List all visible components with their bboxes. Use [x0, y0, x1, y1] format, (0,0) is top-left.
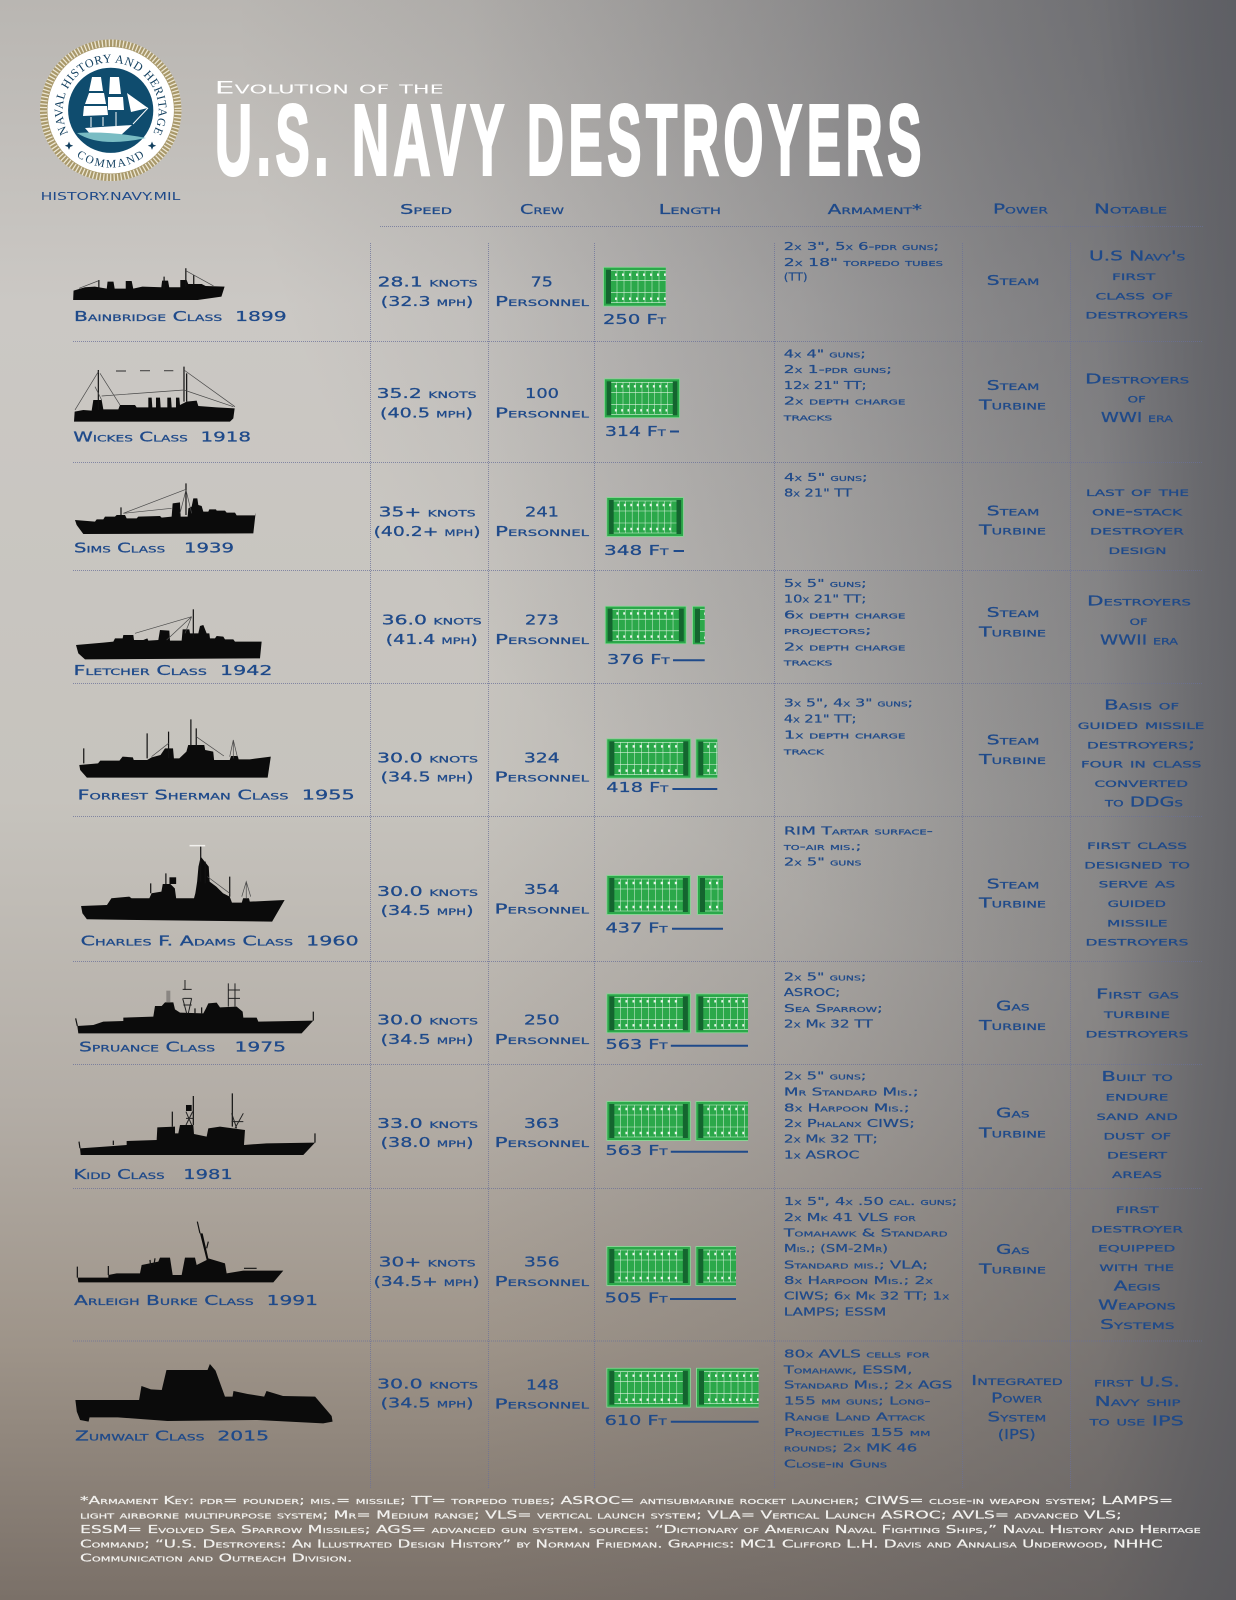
ship name: Fletcher Class 1942 — [74, 664, 272, 679]
row: Zumwalt Class 2015 — [75, 1348, 1184, 1471]
speed — [374, 505, 481, 540]
armament: 1x ASROC — [784, 1150, 859, 1162]
crew — [494, 1117, 589, 1151]
armament: 12x 21" TT; — [784, 380, 867, 392]
notable: guided missile — [1078, 718, 1205, 733]
row: Sims Class 1939 — [74, 472, 1190, 559]
armament: Projectiles 155 mm — [784, 1427, 930, 1439]
armament: 2x depth charge — [784, 396, 906, 408]
logo: Naval History and Heritage Command seal — [40, 40, 182, 182]
seal text bottom: COMMAND — [78, 151, 143, 168]
row: Fletcher Class 1942 — [74, 578, 1191, 679]
armament: Mis.; (SM-2Mr) — [784, 1243, 888, 1255]
speed — [377, 387, 477, 421]
speed: (34.5 mph) — [381, 904, 474, 919]
crew: Personnel — [494, 771, 589, 786]
notable — [1078, 698, 1205, 810]
notable: destroyers — [1085, 308, 1189, 323]
power: Gas — [996, 1107, 1030, 1122]
armament: Mr Standard Mis.; — [784, 1087, 919, 1099]
notable: last of the — [1086, 485, 1190, 500]
notable: Built to — [1101, 1070, 1173, 1085]
armament: 4x 21" TT; — [784, 713, 856, 725]
crew — [494, 1378, 589, 1413]
crew: 75 — [531, 276, 553, 291]
ship: Spruance — [76, 980, 313, 1033]
length: football field comparison — [606, 1101, 779, 1159]
armament: 5x 5" guns; — [784, 578, 867, 590]
speed — [378, 276, 478, 310]
notable — [1084, 838, 1190, 950]
notable: destroyer — [1091, 1221, 1183, 1236]
speed — [374, 1256, 480, 1290]
ship name: Sims Class 1939 — [74, 542, 234, 557]
speed: 36.0 knots — [382, 614, 482, 629]
footnote: armament key and sources: light airborne multipurpose system; Mr= Medium range; VLS= vertical launch system; VLA= Vertical Launch ASROC; AVLS= advanced VLS; — [80, 1510, 1122, 1522]
speed: (41.4 mph) — [386, 633, 478, 648]
ship name: Spruance Class 1975 — [79, 1040, 286, 1055]
notable: four in class — [1081, 757, 1202, 772]
speed: 33.0 knots — [377, 1117, 478, 1132]
notable: destroyer — [1090, 524, 1184, 539]
notable: first class — [1087, 838, 1187, 853]
length: football field comparison — [604, 497, 684, 559]
length: football field comparison: 610 Ft — [605, 1414, 667, 1429]
column headers: Armament* — [828, 203, 923, 218]
crew — [494, 883, 589, 918]
notable: design — [1108, 543, 1166, 558]
crew: 241 — [525, 505, 559, 520]
power: Turbine — [977, 1263, 1046, 1278]
speed: 28.1 knots — [378, 276, 478, 291]
speed: 30.0 knots — [377, 1014, 478, 1029]
power: Steam — [987, 877, 1039, 892]
power — [971, 1374, 1063, 1443]
notable: converted — [1094, 776, 1188, 791]
armament: (TT) — [784, 272, 808, 284]
notable: Weapons — [1098, 1299, 1176, 1314]
armament — [784, 1071, 919, 1162]
length: football field comparison — [606, 875, 781, 936]
notable: WWI era — [1101, 411, 1174, 426]
length: football field comparison: 376 Ft — [607, 653, 670, 668]
column headers: Notable — [1094, 202, 1168, 217]
row: Kidd Class 1981 — [74, 1070, 1178, 1183]
seal stars — [65, 142, 156, 150]
speed: (34.5 mph) — [381, 771, 474, 786]
armament: ASROC; — [784, 987, 840, 999]
speed: 30.0 knots — [377, 885, 478, 900]
ship name: Zumwalt Class 2015 — [75, 1430, 269, 1445]
armament: 10x 21" TT; — [784, 594, 866, 606]
length: football field comparison: 250 Ft — [603, 313, 667, 328]
length: football field comparison: 563 Ft — [606, 1038, 668, 1053]
notable: first — [1116, 1202, 1159, 1217]
notable — [1091, 1202, 1183, 1333]
power: Steam — [987, 274, 1039, 289]
armament: to-air mis.; — [782, 841, 861, 853]
notable: with the — [1099, 1260, 1175, 1275]
notable — [1085, 372, 1190, 426]
notable: areas — [1112, 1167, 1162, 1182]
speed: 30.0 knots — [377, 1377, 478, 1392]
notable: dust of — [1104, 1128, 1171, 1143]
crew — [495, 505, 589, 540]
column headers: Crew — [520, 203, 564, 218]
seal ship — [83, 77, 148, 136]
ship: Fletcher — [76, 609, 262, 659]
power: Steam — [987, 379, 1039, 394]
armament: 1x depth charge — [784, 729, 906, 741]
length: football field comparison: 314 Ft — [605, 425, 666, 440]
armament: 2x 5" guns; — [784, 1071, 866, 1083]
notable: destroyers — [1086, 935, 1189, 950]
armament: 2x 1-pdr guns; — [784, 364, 892, 376]
ship: Charles F. Adams — [81, 846, 285, 922]
ship: Arleigh Burke — [77, 1222, 283, 1282]
ship: Sims — [75, 483, 256, 534]
armament: Tomahawk & Standard — [782, 1228, 948, 1240]
crew: 356 — [524, 1256, 560, 1271]
length: football field comparison: 348 Ft — [604, 544, 669, 559]
notable — [1085, 249, 1189, 323]
crew: Personnel — [495, 295, 589, 310]
length: football field comparison: 505 Ft — [605, 1291, 668, 1306]
speed — [377, 1014, 478, 1048]
power — [977, 734, 1046, 768]
ship name: Kidd Class 1981 — [74, 1168, 233, 1183]
power — [977, 877, 1046, 912]
ship name: Bainbridge Class 1899 — [74, 310, 287, 325]
speed — [377, 1117, 478, 1151]
armament: 2x Mk 41 VLS for — [784, 1212, 916, 1224]
armament: 4x 5" guns; — [784, 472, 868, 484]
armament: 2x 5" guns — [784, 857, 862, 869]
speed — [382, 614, 482, 648]
power: Turbine — [977, 399, 1046, 414]
power: Steam — [987, 734, 1039, 749]
crew — [495, 387, 589, 421]
armament — [784, 472, 868, 500]
armament: LAMPS; ESSM — [784, 1306, 886, 1318]
speed: (34.5+ mph) — [374, 1275, 480, 1290]
speed: 35.2 knots — [377, 387, 477, 402]
power — [977, 606, 1046, 640]
length: football field comparison — [603, 267, 687, 328]
power: Integrated — [971, 1374, 1063, 1389]
length: football field comparison — [606, 993, 779, 1053]
crew: Personnel — [494, 1033, 589, 1048]
armament: 6x depth charge — [784, 610, 906, 622]
footnote: armament key and sources — [80, 1495, 1201, 1565]
speed — [377, 885, 478, 919]
power: Gas — [996, 1000, 1030, 1015]
footnote: armament key and sources: Command; “U.S. Destroyers: An Illustrated Design History” by Norman Friedman. Graphics: MC1 Clifford L.H. Davis and Annalisa Underwood, NHHC — [80, 1538, 1163, 1550]
speed: 30+ knots — [379, 1256, 476, 1271]
speed — [377, 1377, 478, 1412]
armament: 2x 5" guns; — [784, 971, 866, 983]
notable: missile — [1107, 915, 1168, 930]
armament: Standard mis.; VLA; — [784, 1259, 928, 1271]
crew — [494, 751, 589, 786]
speed: 35+ knots — [379, 505, 476, 520]
armament — [782, 825, 933, 869]
row: Bainbridge Class 1899 — [73, 241, 1189, 328]
armament — [782, 578, 906, 669]
ship: Zumwalt — [75, 1364, 333, 1423]
speed: 30.0 knots — [377, 751, 478, 766]
row: Forrest Sherman Class 1955 — [78, 698, 1205, 810]
crew: Personnel — [494, 1136, 589, 1151]
armament: CIWS; 6x Mk 32 TT; 1x — [784, 1291, 949, 1303]
power: System — [988, 1410, 1046, 1425]
armament: Sea Sparrow; — [784, 1003, 883, 1015]
notable: turbine — [1102, 1007, 1171, 1022]
notable: WWII era — [1100, 633, 1179, 648]
speed — [377, 751, 478, 786]
notable: first — [1112, 269, 1156, 284]
ship name: Arleigh Burke Class 1991 — [74, 1294, 318, 1309]
armament: Standard Mis.; 2x AGS — [784, 1380, 953, 1392]
row: Spruance Class 1975 — [76, 971, 1189, 1055]
notable: Navy ship — [1094, 1395, 1182, 1410]
power: Turbine — [977, 625, 1046, 640]
armament: 2x Mk 32 TT — [784, 1019, 874, 1031]
speed: (40.5 mph) — [380, 406, 473, 421]
crew — [494, 1256, 589, 1290]
armament: 2x Phalanx CIWS; — [784, 1118, 915, 1130]
crew: 354 — [524, 883, 560, 898]
armament: RIM Tartar surface- — [784, 825, 933, 837]
seal rigging — [91, 108, 148, 127]
length: football field comparison: 418 Ft — [606, 781, 669, 796]
row: Arleigh Burke Class 1991 — [74, 1196, 1183, 1333]
notable: designed to — [1084, 857, 1190, 872]
row: Charles F. Adams Class 1960 — [81, 825, 1190, 950]
title kicker: Evolution of the — [215, 79, 444, 99]
notable: class of — [1096, 288, 1173, 303]
crew: Personnel — [495, 525, 589, 540]
armament — [782, 698, 913, 757]
armament: 2x depth charge — [784, 641, 906, 653]
column headers: Speed — [400, 203, 452, 218]
armament: Close-in Guns — [784, 1459, 888, 1471]
seal feather — [77, 133, 146, 142]
crew: 324 — [524, 751, 560, 766]
footnote: armament key and sources: Communication and Outreach Division. — [80, 1553, 352, 1565]
seal text top: NAVAL HISTORY AND HERITAGE — [54, 54, 167, 136]
armament — [784, 971, 883, 1031]
notable: First gas — [1096, 987, 1179, 1002]
ship: Kidd — [79, 1093, 315, 1155]
armament: Tomahawk, ESSM, — [782, 1364, 912, 1376]
notable: Destroyers — [1087, 595, 1191, 610]
armament: 2x 3", 5x 6-pdr guns; — [784, 241, 939, 253]
armament: 80x AVLS cells for — [784, 1348, 930, 1360]
notable: to use IPS — [1088, 1414, 1184, 1429]
armament: 2x 18" torpedo tubes — [784, 257, 944, 269]
power: Turbine — [977, 897, 1046, 912]
notable: U.S Navy's — [1089, 249, 1186, 264]
power: Steam — [987, 606, 1039, 621]
power — [977, 379, 1046, 414]
crew: 363 — [524, 1117, 560, 1132]
length: football field comparison — [606, 738, 779, 796]
link: history.navy.mil: HISTORY.NAVY.MIL — [41, 191, 181, 203]
armament — [782, 1196, 957, 1318]
power: Turbine — [977, 1126, 1046, 1141]
length: football field comparison: 563 Ft — [606, 1144, 668, 1159]
speed: (34.5 mph) — [381, 1033, 474, 1048]
armament — [784, 241, 944, 284]
crew: 100 — [525, 387, 559, 402]
notable: sand and — [1096, 1109, 1178, 1124]
crew: 273 — [525, 614, 559, 629]
speed: (32.3 mph) — [381, 295, 473, 310]
notable: Systems — [1100, 1318, 1175, 1333]
speed: (38.0 mph) — [381, 1136, 474, 1151]
power: Turbine — [977, 1019, 1046, 1034]
length: football field comparison — [605, 606, 776, 668]
column headers: Power — [993, 202, 1048, 217]
notable: of — [1128, 392, 1146, 407]
notable: Basis of — [1104, 698, 1179, 713]
notable: serve as — [1099, 877, 1176, 892]
armament: 8x Harpoon Mis.; — [784, 1102, 910, 1114]
armament: 2x Mk 32 TT; — [784, 1134, 878, 1146]
ship: Forrest Sherman — [79, 719, 271, 778]
armament: 4x 4" guns; — [784, 348, 866, 360]
notable: Aegis — [1114, 1279, 1161, 1294]
notable: guided — [1108, 896, 1166, 911]
armament: 155 mm guns; Long- — [784, 1396, 931, 1408]
armament: projectors; — [784, 625, 872, 637]
column headers — [400, 202, 1168, 218]
column headers: Length — [659, 203, 721, 218]
row: Wickes Class 1918 — [73, 348, 1190, 446]
armament: 1x 5", 4x .50 cal. guns; — [784, 1196, 957, 1208]
crew: Personnel — [494, 1398, 589, 1413]
notable: first U.S. — [1094, 1376, 1180, 1391]
notable — [1086, 485, 1190, 558]
ship: Bainbridge — [73, 268, 225, 300]
power — [977, 504, 1046, 539]
notable: to DDGs — [1104, 795, 1183, 810]
table grid — [73, 226, 1203, 1488]
armament: 8x 21" TT — [784, 488, 853, 500]
ship name: Forrest Sherman Class 1955 — [78, 788, 355, 803]
power — [977, 1107, 1046, 1141]
power: Turbine — [977, 753, 1046, 768]
footnote: armament key and sources: *Armament Key: pdr= pounder; mis.= missile; TT= torpedo tubes; ASROC= antisubmarine rocket launcher; CIWS= close-in weapon system; LAMPS= — [80, 1495, 1173, 1507]
crew: 250 — [524, 1014, 560, 1029]
armament: tracks — [782, 412, 833, 424]
ship name: Wickes Class 1918 — [73, 431, 251, 446]
ship: Wickes — [74, 367, 235, 422]
notable — [1088, 1376, 1184, 1429]
crew: Personnel — [495, 406, 589, 421]
power: Gas — [996, 1243, 1030, 1258]
crew — [495, 614, 589, 648]
notable: equipped — [1098, 1241, 1175, 1256]
length: football field comparison: 437 Ft — [606, 921, 668, 936]
armament: Range Land Attack — [784, 1411, 925, 1423]
notable: one-stack — [1092, 504, 1184, 519]
armament: 3x 5", 4x 3" guns; — [784, 698, 913, 710]
power — [977, 1243, 1046, 1278]
armament: rounds; 2x MK 46 — [784, 1443, 918, 1455]
power: Power — [991, 1392, 1042, 1407]
crew: Personnel — [494, 903, 589, 918]
length: football field comparison — [604, 378, 680, 440]
length: football field comparison — [605, 1246, 779, 1306]
armament — [782, 348, 906, 424]
notable — [1096, 1070, 1178, 1182]
armament: track — [782, 745, 825, 757]
footnote: armament key and sources: ESSM= Evolved Sea Sparrow Missiles; AGS= advanced gun system. sources: “Dictionary of American Naval Fighting Ships,” Naval History and Heritage — [80, 1524, 1201, 1536]
crew: 148 — [526, 1378, 559, 1393]
notable: desert — [1107, 1148, 1168, 1163]
power — [977, 1000, 1046, 1034]
notable: destroyers — [1086, 1026, 1189, 1041]
length: football field comparison — [605, 1368, 780, 1429]
power: Steam — [987, 504, 1039, 519]
crew — [494, 1014, 589, 1048]
crew: Personnel — [495, 633, 589, 648]
speed: (34.5 mph) — [381, 1397, 474, 1412]
crew — [495, 276, 589, 310]
armament: tracks — [782, 657, 833, 669]
ship name: Charles F. Adams Class 1960 — [81, 935, 359, 950]
notable: endure — [1106, 1090, 1169, 1105]
crew: Personnel — [494, 1275, 589, 1290]
armament — [782, 1348, 953, 1471]
armament: 8x Harpoon Mis.; 2x — [784, 1275, 933, 1287]
notable: of — [1130, 614, 1148, 629]
speed: (40.2+ mph) — [374, 525, 481, 540]
notable: Destroyers — [1085, 372, 1190, 387]
power: Turbine — [977, 524, 1046, 539]
notable — [1086, 987, 1189, 1041]
notable — [1087, 595, 1191, 648]
notable: destroyers; — [1087, 737, 1195, 752]
power: (IPS) — [998, 1428, 1036, 1443]
